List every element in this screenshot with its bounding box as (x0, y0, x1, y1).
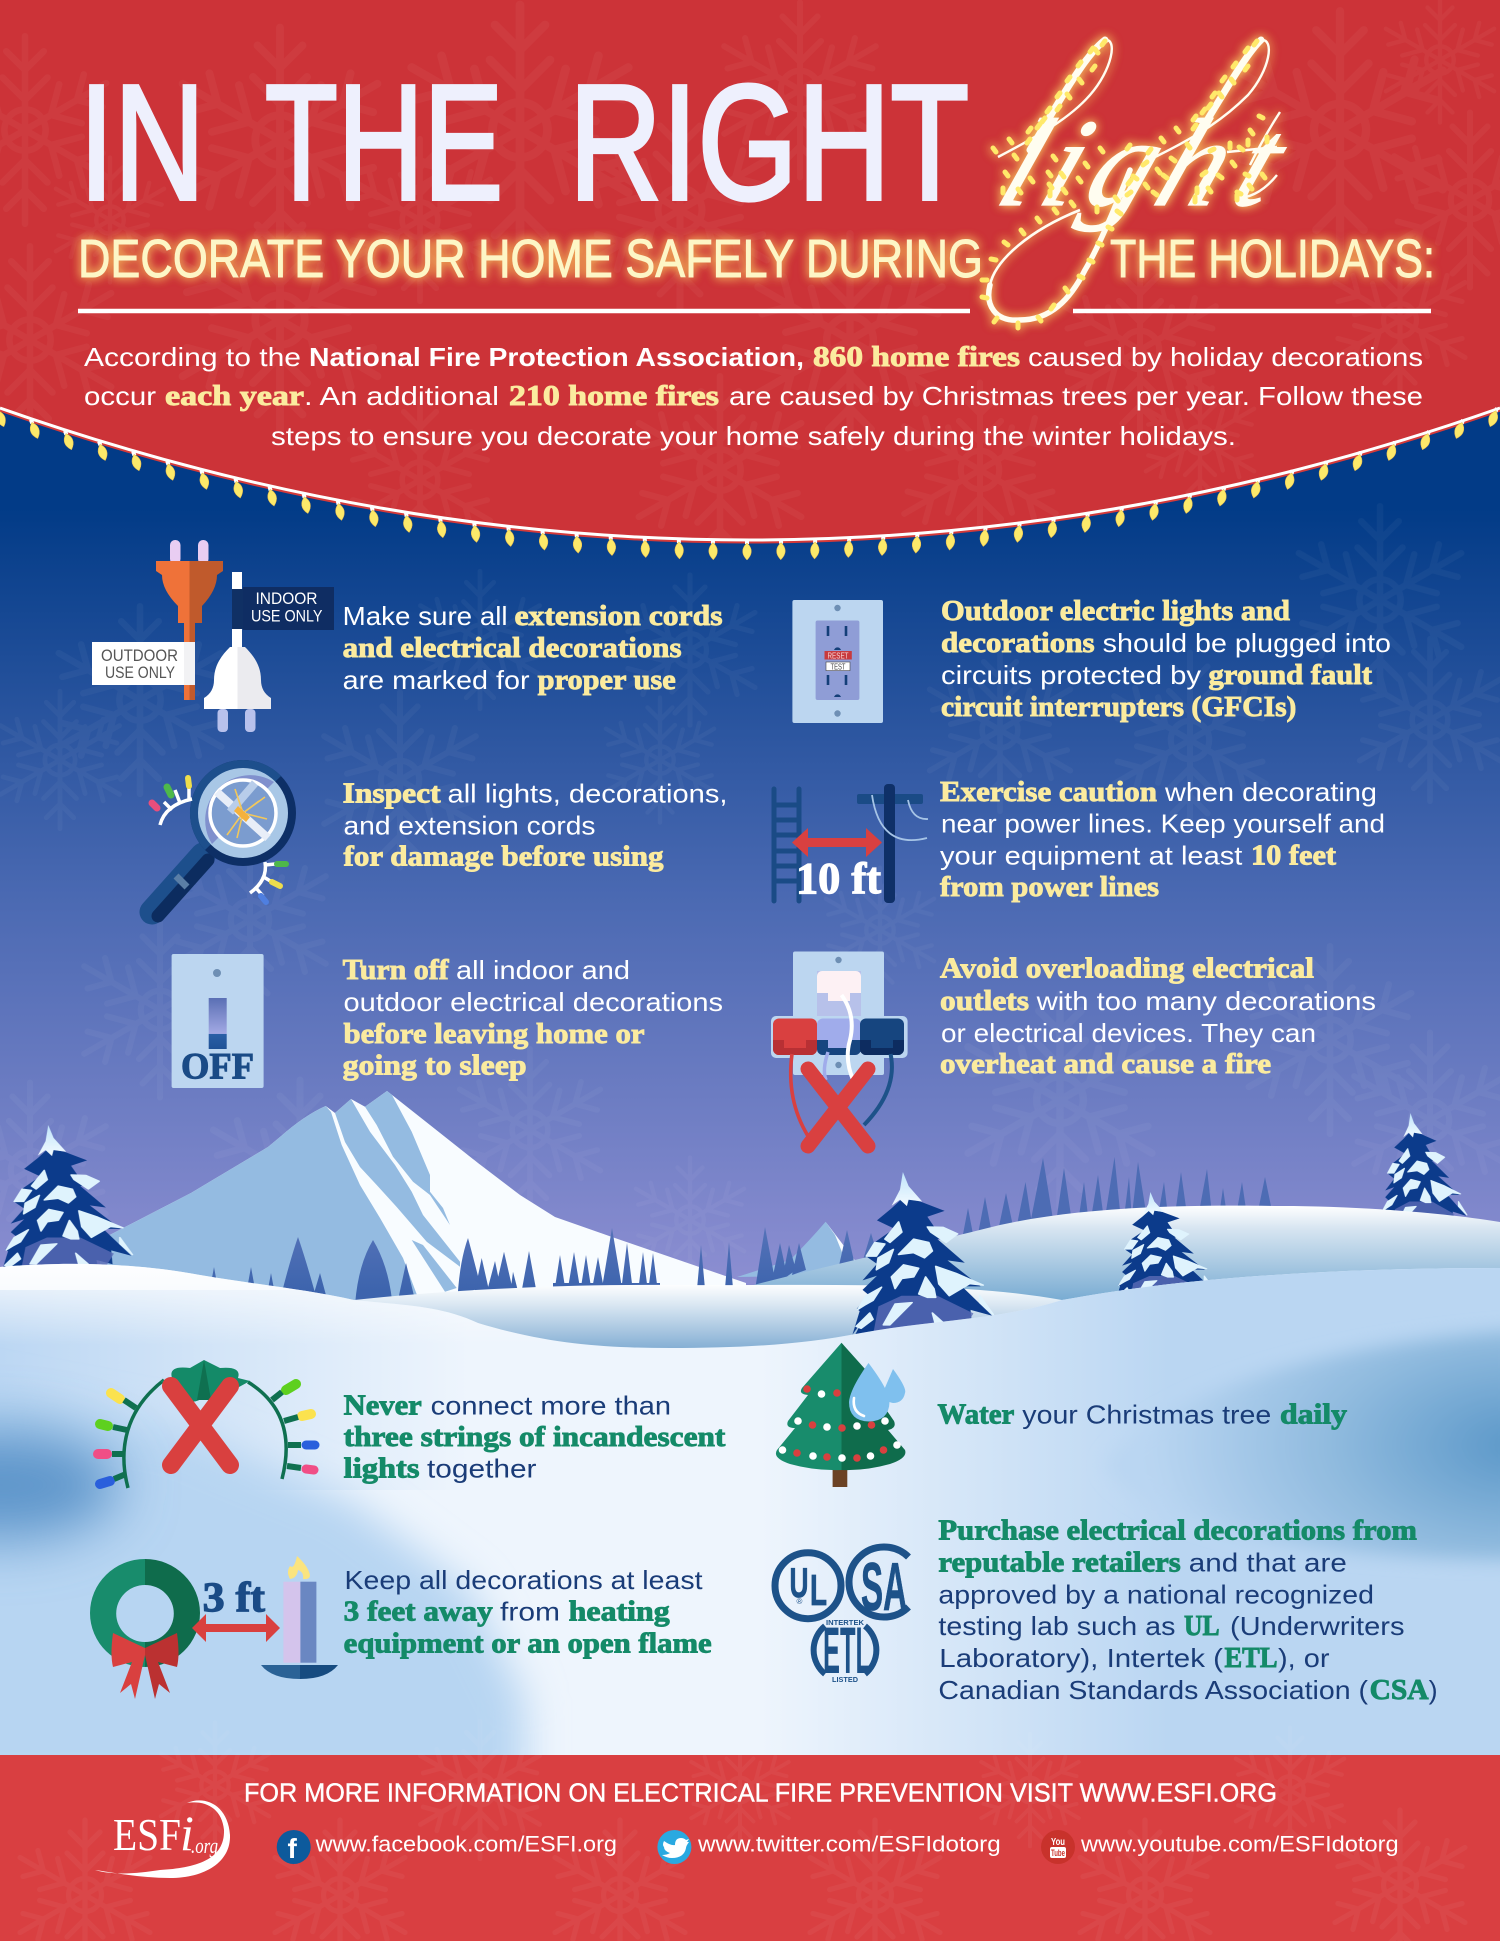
icon: overloaded outlet (771, 952, 908, 1146)
text: inspect: and extension cords (344, 811, 596, 841)
scene: left pine (1, 1125, 132, 1275)
intro paragraph: occur (84, 381, 156, 411)
text: GFCI (941, 595, 1391, 723)
text: extension cords: are marked for (343, 665, 530, 695)
text: turn off: going to sleep (343, 1050, 527, 1082)
icon: UL CSA ETL certification marks: INTERTEK (826, 1618, 865, 1627)
text: power lines: near power lines. Keep yourself and (941, 808, 1385, 838)
title: glowing script word light (982, 40, 1307, 328)
background: sky snowflakes (0, 506, 1500, 1282)
text: power lines (940, 776, 1385, 903)
icon: indoor and outdoor plugs: USE ONLY (105, 663, 175, 682)
text: power lines: your equipment at least (940, 840, 1243, 870)
text: turn off (343, 954, 723, 1082)
icon: GFCI outlet: RESET (828, 652, 849, 661)
text: purchase from reputable retailers: and that are (1189, 1547, 1347, 1577)
text: keep decorations away: heating (569, 1596, 670, 1628)
title: In the Right (79, 51, 969, 234)
text: never connect: together (427, 1454, 537, 1484)
text: purchase from reputable retailers: Laboratory), Intertek ( (939, 1643, 1223, 1673)
background: footer snowflakes (11, 1721, 1474, 1941)
text: GFCI: should be plugged into (1103, 628, 1391, 658)
text: inspect: for damage before using (344, 841, 664, 873)
social: youtube: You (1051, 1837, 1065, 1848)
social: youtube: Tube (1051, 1848, 1065, 1858)
intro paragraph: each year (165, 380, 304, 412)
text: GFCI: Outdoor electric lights and (941, 595, 1290, 627)
text: power lines: 10 feet (1251, 839, 1336, 871)
text: power lines: from power lines (940, 871, 1159, 903)
text: purchase from reputable retailers: approved by a national recognized (938, 1579, 1374, 1609)
icon: wreath 3 ft from candle (90, 1556, 338, 1699)
icon: indoor and outdoor plugs: OUTDOOR (101, 646, 178, 665)
text: extension cords: proper use (538, 664, 676, 696)
text: purchase from reputable retailers: ) (1429, 1675, 1438, 1705)
text: power lines: Exercise caution (940, 776, 1157, 808)
intro paragraph: 860 home fires (813, 341, 1020, 373)
title: In the Right: IN (79, 51, 205, 234)
intro paragraph: caused by holiday decorations (1028, 342, 1423, 372)
logo: ESFi.org: .org (191, 1833, 218, 1858)
text: purchase from reputable retailers: Purchase electrical decorations from (938, 1514, 1417, 1546)
social: twitter: www.twitter.com/ESFIdotorg (697, 1832, 1001, 1857)
icon: Christmas tree with water drops (776, 1343, 905, 1487)
icon: GFCI outlet (792, 600, 883, 723)
icon: UL CSA ETL certification marks: ® (796, 1597, 802, 1606)
intro paragraph: 210 home fires (509, 380, 719, 412)
icon: UL CSA ETL certification marks (775, 1547, 908, 1687)
text: GFCI: circuit interrupters (GFCIs) (941, 691, 1296, 723)
text: keep decorations away: 3 feet away (344, 1596, 493, 1628)
icon: indoor and outdoor plugs: INDOOR (256, 589, 318, 608)
text: extension cords (343, 600, 722, 696)
text: extension cords: Make sure all (343, 601, 508, 631)
text: never connect: three strings of incandescent (344, 1421, 726, 1453)
text: GFCI: decorations (941, 627, 1095, 659)
footer heading: FOR MORE INFORMATION ON ELECTRICAL FIRE PREVENTION VISIT WWW.ESFI.ORG (244, 1778, 1277, 1808)
scene: foreground snow (0, 1264, 1500, 1755)
text: never connect: connect more than (431, 1390, 671, 1420)
icon: light switch off (172, 954, 264, 1088)
text: overloading: overheat and cause a fire (940, 1048, 1271, 1080)
title: glowing script word light: light (982, 95, 1307, 233)
icon: indoor and outdoor plugs (92, 540, 334, 732)
text: water tree: your Christmas tree (1022, 1399, 1271, 1429)
text: purchase from reputable retailers: reputable retailers (938, 1546, 1181, 1578)
text: water tree: Water (938, 1398, 1014, 1430)
icon: light switch off: OFF (181, 1047, 254, 1088)
background: header snowflakes (0, 0, 1500, 564)
scene: middle snow hill (354, 1285, 1062, 1360)
text: overloading: or electrical devices. They can (941, 1018, 1316, 1048)
scene: front pine (852, 1172, 993, 1337)
intro paragraph: . An additional (304, 381, 499, 411)
social: facebook (277, 1830, 617, 1864)
text: turn off: outdoor electrical decorations (344, 987, 723, 1017)
scene: far right pine (1379, 1113, 1467, 1231)
intro paragraph (84, 341, 1423, 451)
text: never connect (344, 1389, 726, 1485)
text: extension cords: extension cords (514, 600, 722, 632)
intro paragraph: National Fire Protection Association, (309, 342, 804, 372)
title: In the Right: THE (265, 51, 503, 234)
text: power lines: when decorating (1164, 777, 1377, 807)
icon: GFCI outlet: TEST (830, 663, 846, 672)
text: purchase from reputable retailers (938, 1514, 1438, 1706)
text: never connect: lights (344, 1453, 420, 1485)
text: purchase from reputable retailers: testing lab such as (938, 1611, 1175, 1641)
logo: ESFi.org (95, 1800, 230, 1878)
scene: mountains (100, 1091, 866, 1310)
icon: ladder and power pole 10 ft: 10 ft (796, 854, 881, 903)
social: facebook: www.facebook.com/ESFI.org (315, 1832, 617, 1857)
text: purchase from reputable retailers: ETL (1224, 1642, 1278, 1674)
text: overloading: outlets (940, 985, 1029, 1017)
icon: magnifying glass over damaged lights (152, 760, 296, 916)
text: inspect (343, 777, 728, 873)
icon: UL CSA ETL certification marks: L (810, 1566, 827, 1615)
social: twitter (657, 1830, 1001, 1864)
text: turn off: all indoor and (456, 955, 630, 985)
intro paragraph: steps to ensure you decorate your home safely during the winter holidays. (271, 421, 1236, 451)
text: purchase from reputable retailers: ), or (1278, 1643, 1330, 1673)
text: keep decorations away (344, 1565, 712, 1660)
icon: indoor and outdoor plugs: USE ONLY (251, 606, 322, 626)
text: extension cords: and electrical decorations (343, 632, 682, 664)
scene: rear pine (1115, 1192, 1214, 1304)
text: overloading: Avoid overloading electrical (940, 953, 1314, 985)
social: youtube: www.youtube.com/ESFIdotorg (1080, 1832, 1399, 1857)
logo: ESFi.org: i (180, 1805, 194, 1861)
social: youtube (1041, 1830, 1399, 1864)
icon: wreath 3 ft from candle: 3 ft (203, 1576, 265, 1622)
text: overloading (940, 953, 1376, 1080)
title: In the Right: RIGHT (569, 51, 969, 234)
text: purchase from reputable retailers: CSA (1370, 1674, 1429, 1706)
text: overloading: with too many decorations (1035, 986, 1376, 1016)
subtitle: DECORATE YOUR HOME SAFELY DURING (78, 229, 983, 289)
logo: ESFi.org: ESF (113, 1809, 181, 1860)
background: night sky gradient (0, 400, 1500, 1300)
icon: UL CSA ETL certification marks: ETL (823, 1613, 871, 1687)
text: turn off: before leaving home or (344, 1018, 645, 1050)
red header panel (0, 0, 1500, 540)
text: inspect: Inspect (343, 777, 441, 809)
text: purchase from reputable retailers: (Underwriters (1230, 1611, 1404, 1641)
text: never connect: Never (344, 1389, 422, 1421)
text: GFCI: circuits protected by (941, 660, 1201, 690)
footer panel (0, 1755, 1500, 1941)
text: turn off: Turn off (343, 954, 449, 986)
text: water tree (938, 1398, 1348, 1430)
icon: UL CSA ETL certification marks: U (790, 1559, 808, 1606)
text: purchase from reputable retailers: UL (1184, 1610, 1220, 1642)
text: GFCI: ground fault (1208, 659, 1372, 691)
text: purchase from reputable retailers: Canadian Standards Association ( (938, 1675, 1368, 1705)
text: keep decorations away: from (500, 1597, 560, 1627)
scene: right rear snow hill (746, 1206, 1500, 1320)
icon: UL CSA ETL certification marks: LISTED (832, 1677, 858, 1684)
text: keep decorations away: Keep all decorations at least (344, 1565, 703, 1595)
icon: UL CSA ETL certification marks: SA (861, 1549, 907, 1625)
scene: distant tree line (208, 1227, 879, 1310)
string of lights along the curve (0, 406, 1500, 560)
icon: light string with X (98, 1360, 315, 1488)
text: keep decorations away: equipment or an open flame (344, 1628, 712, 1660)
text: inspect: all lights, decorations, (448, 778, 728, 808)
social: facebook: f (288, 1833, 298, 1864)
intro paragraph: are caused by Christmas trees per year. Follow these (729, 381, 1423, 411)
intro paragraph: According to the (84, 342, 301, 372)
text: water tree: daily (1280, 1398, 1348, 1430)
icon: ladder and power pole 10 ft (774, 784, 928, 903)
scene: far right tree line (960, 1157, 1280, 1250)
